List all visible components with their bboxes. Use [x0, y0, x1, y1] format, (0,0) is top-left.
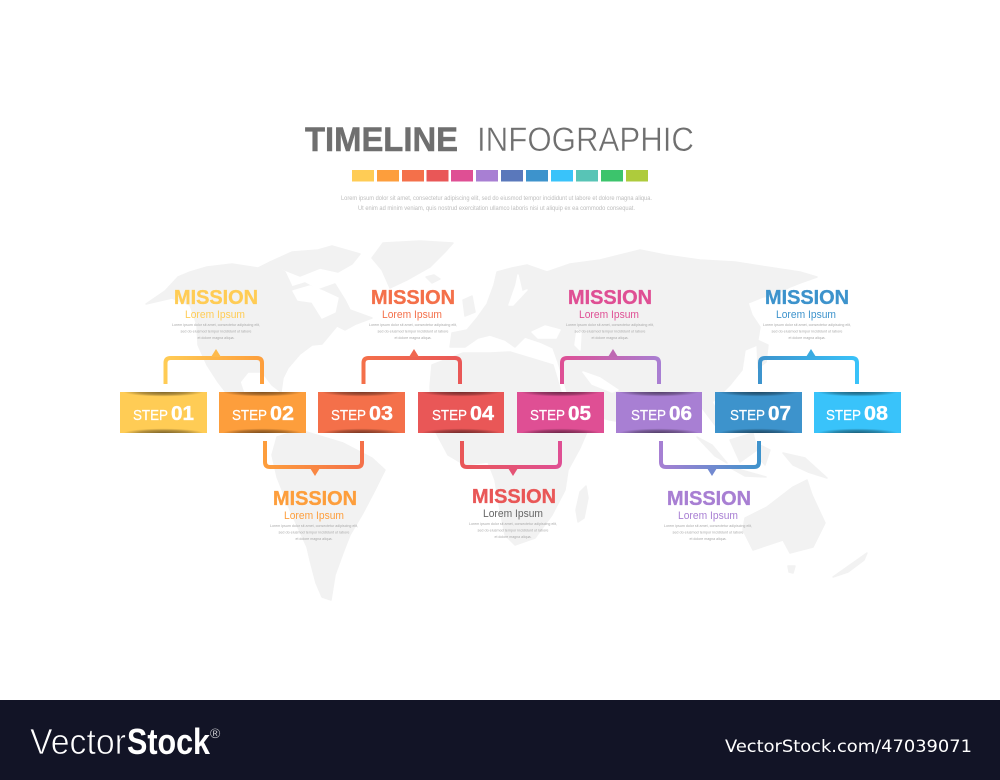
step 02 box: 02	[270, 403, 294, 425]
mission text: step 06: Lorem Ipsum	[678, 510, 738, 522]
title: INFOGRAPHIC	[477, 121, 694, 159]
connector bracket 5-6	[562, 349, 659, 384]
mission text: step 01: sed do eiusmod tempor incididunt ut labore	[180, 328, 252, 334]
mission text: step 03: Lorem Ipsum	[382, 309, 442, 321]
mission text: step 05: MISSION	[568, 287, 652, 309]
intro text	[341, 195, 652, 212]
step 07 box	[715, 392, 802, 433]
mission text: step 01	[172, 287, 260, 340]
title	[305, 121, 694, 159]
step 02 box	[219, 392, 306, 433]
mission text: step 04: et dolore magna aliqua.	[494, 534, 532, 539]
mission text: step 07	[763, 287, 851, 340]
mission text: step 06	[664, 488, 752, 541]
mission text: step 06: MISSION	[667, 488, 751, 510]
connector bracket 2-3	[265, 441, 362, 476]
step 08 box: STEP	[826, 407, 861, 424]
step 05 box: 05	[568, 403, 591, 425]
footer bar	[0, 700, 1000, 780]
step 07 box: STEP	[730, 407, 765, 424]
mission text: step 04	[469, 486, 557, 539]
mission text: step 03: MISSION	[371, 287, 455, 309]
mission text: step 05: Lorem ipsum dolor sit amet, consectetur adipiscing elit,	[566, 322, 654, 327]
step 01 box: STEP	[133, 407, 168, 424]
mission text: step 05: et dolore magna aliqua.	[592, 335, 628, 340]
step 03 box	[318, 392, 405, 433]
footer image id: VectorStock.com/47039071	[725, 737, 972, 757]
mission text: step 06: sed do eiusmod tempor incididunt ut labore	[672, 530, 744, 534]
title: TIMELINE	[305, 121, 458, 159]
mission text: step 04: Lorem Ipsum	[483, 508, 543, 520]
step 01 box: 01	[171, 403, 194, 425]
intro text: Ut enim ad minim veniam, quis nostrud exercitation ullamco laboris nisi ut aliquip ex ea commodo consequat.	[358, 205, 635, 212]
mission text: step 02: MISSION	[273, 488, 357, 510]
step 08 box	[814, 392, 901, 433]
step 06 box	[616, 392, 702, 433]
mission text: step 07: MISSION	[765, 287, 849, 309]
mission text: step 02	[270, 488, 358, 541]
step 02 box: STEP	[232, 407, 267, 424]
step 08 box: 08	[864, 403, 888, 425]
step 04 box: 04	[470, 403, 495, 425]
mission text: step 01: Lorem ipsum dolor sit amet, consectetur adipiscing elit,	[172, 322, 260, 327]
connector bracket 1-2	[166, 349, 262, 384]
mission text: step 05	[566, 287, 654, 340]
mission text: step 02: sed do eiusmod tempor incididunt ut labore	[278, 530, 350, 534]
footer logo: ®	[210, 725, 221, 741]
step 03 box: 03	[369, 403, 393, 425]
background world map	[146, 241, 867, 600]
mission text: step 04: Lorem ipsum dolor sit amet, consectetur adipiscing elit,	[469, 521, 557, 526]
step 06 box: STEP	[631, 407, 666, 424]
mission text: step 05: sed do eiusmod tempor incididunt ut labore	[574, 328, 646, 334]
colour swatch bar	[352, 170, 648, 182]
mission text: step 01: MISSION	[174, 287, 258, 309]
step 01 box	[120, 392, 207, 433]
footer logo: Stock	[127, 721, 211, 762]
connector bracket 3-4	[364, 349, 460, 384]
step 04 box: STEP	[432, 407, 467, 424]
mission text: step 03: Lorem ipsum dolor sit amet, consectetur adipiscing elit,	[369, 322, 457, 327]
mission text: step 01: Lorem Ipsum	[185, 309, 245, 321]
step 07 box: 07	[768, 403, 791, 425]
mission text: step 04: sed do eiusmod tempor incididunt ut labore	[478, 528, 549, 532]
mission text: step 02: Lorem Ipsum	[284, 510, 344, 522]
connector bracket 4-5	[462, 441, 560, 476]
mission text: step 05: Lorem Ipsum	[579, 309, 639, 321]
mission text: step 03: et dolore magna aliqua.	[394, 335, 432, 340]
step 05 box	[517, 392, 604, 433]
mission text: step 02: Lorem ipsum dolor sit amet, consectetur adipiscing elit,	[270, 523, 358, 528]
footer logo: Vector	[30, 721, 126, 762]
step 06 box: 06	[669, 403, 692, 425]
mission text: step 06: Lorem ipsum dolor sit amet, consectetur adipiscing elit,	[664, 523, 752, 528]
connector bracket 7-8	[760, 349, 857, 384]
step 04 box	[418, 392, 504, 433]
mission text: step 07: Lorem ipsum dolor sit amet, consectetur adipiscing elit,	[763, 322, 851, 327]
step 03 box: STEP	[331, 407, 366, 424]
mission text: step 04: MISSION	[472, 486, 556, 508]
intro text: Lorem ipsum dolor sit amet, consectetur adipiscing elit, sed do eiusmod tempor incididunt ut labore et dolore magna aliqua.	[341, 195, 652, 202]
mission text: step 07: Lorem Ipsum	[776, 309, 836, 321]
mission text: step 03	[369, 287, 457, 340]
mission text: step 07: sed do eiusmod tempor incididunt ut labore	[772, 328, 843, 334]
mission text: step 01: et dolore magna aliqua.	[198, 335, 234, 340]
mission text: step 02: et dolore magna aliqua.	[296, 536, 332, 541]
step 05 box: STEP	[530, 407, 565, 424]
mission text: step 07: et dolore magna aliqua.	[788, 335, 826, 340]
footer logo	[30, 721, 221, 762]
mission text: step 06: et dolore magna aliqua.	[690, 536, 726, 541]
mission text: step 03: sed do eiusmod tempor incididunt ut labore	[378, 328, 449, 334]
connector bracket 6-7	[661, 441, 759, 476]
